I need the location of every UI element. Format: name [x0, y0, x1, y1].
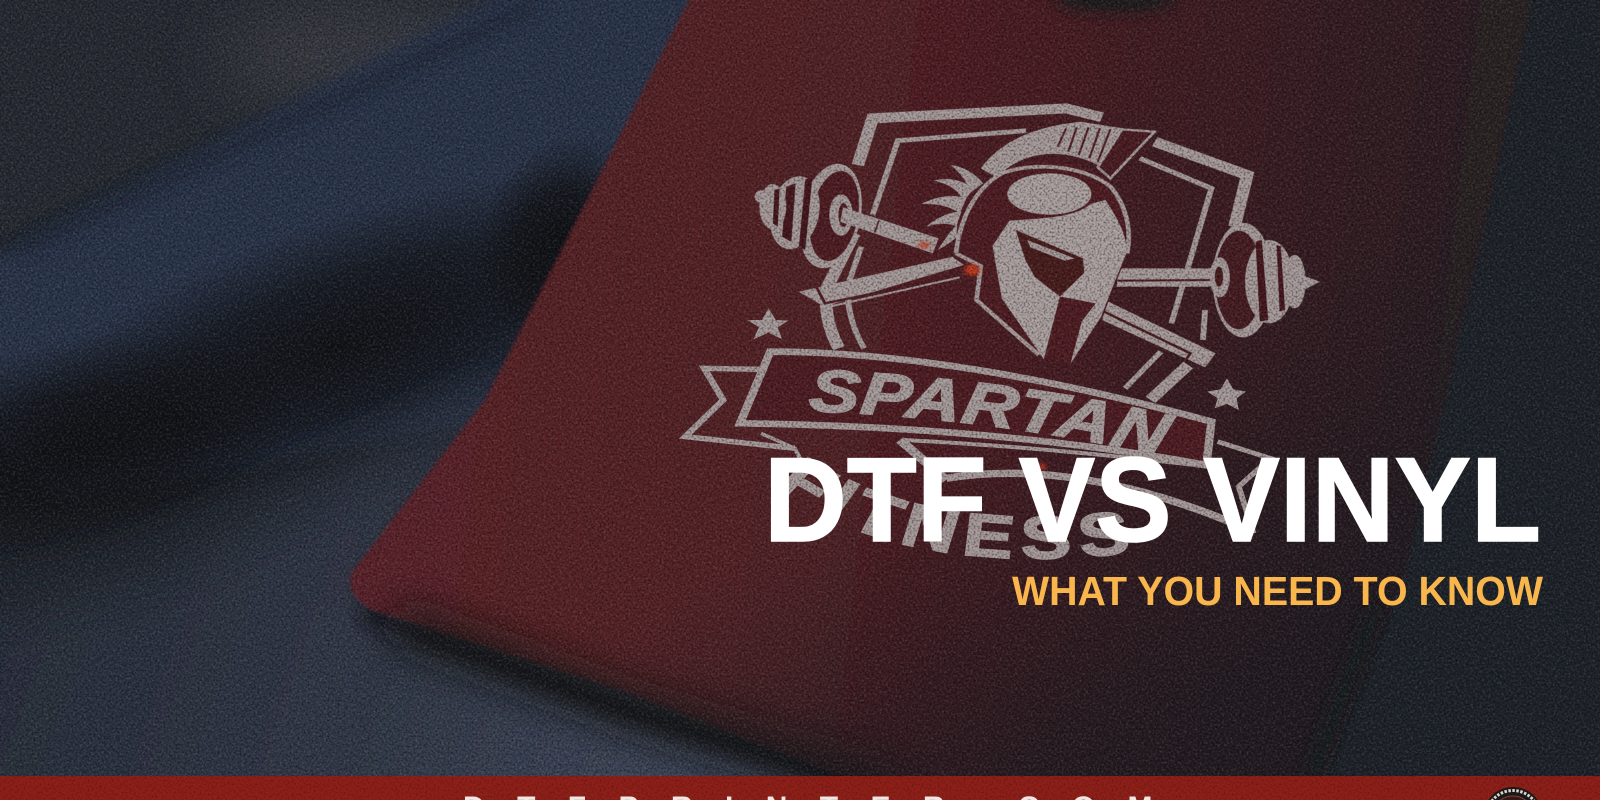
bottom right dark fade: [675, 406, 1420, 776]
banner text: SPARTAN: [808, 370, 1177, 453]
grey fabric top left: [0, 0, 575, 262]
footer bar: [0, 776, 1600, 800]
printed logo: Spartan Fitness: [679, 103, 1320, 560]
subtitle: WHAT YOU NEED TO KNOW: [1012, 568, 1543, 614]
star left: [748, 308, 788, 339]
lower hem shading: [395, 622, 900, 790]
title: DTF VS VINYL: [764, 433, 1541, 567]
face mask: [993, 200, 1127, 364]
dark shadow on fabric: [0, 94, 749, 605]
lower arc text: FITNESS: [788, 456, 1128, 560]
lower right bar: [1102, 302, 1216, 367]
floor fabric: [0, 390, 940, 800]
helmet: [955, 122, 1155, 365]
footer round logo: [1488, 787, 1538, 800]
bar: [840, 207, 939, 253]
blue fabric band: [0, 0, 720, 500]
crest: [981, 122, 1123, 177]
helmet plume: [921, 165, 983, 250]
helmet dome: [1007, 173, 1091, 215]
weight plates: [791, 160, 870, 271]
lighter grey highlight: [215, 0, 515, 110]
left barbell: [755, 160, 939, 271]
glints: [918, 242, 1047, 470]
shield: [826, 108, 1247, 400]
dark spot at the collar: [1055, 0, 1175, 11]
star right: [1207, 378, 1246, 410]
right edge fold: [1310, 610, 1375, 780]
shadow below shirt: [362, 612, 880, 790]
fold line: [20, 5, 535, 250]
red t-shirt: [340, 0, 1540, 800]
eye opening: [1016, 230, 1084, 297]
ribbon banner: [685, 352, 1270, 533]
lower left bar: [799, 257, 964, 307]
right barbell: [1117, 223, 1320, 337]
